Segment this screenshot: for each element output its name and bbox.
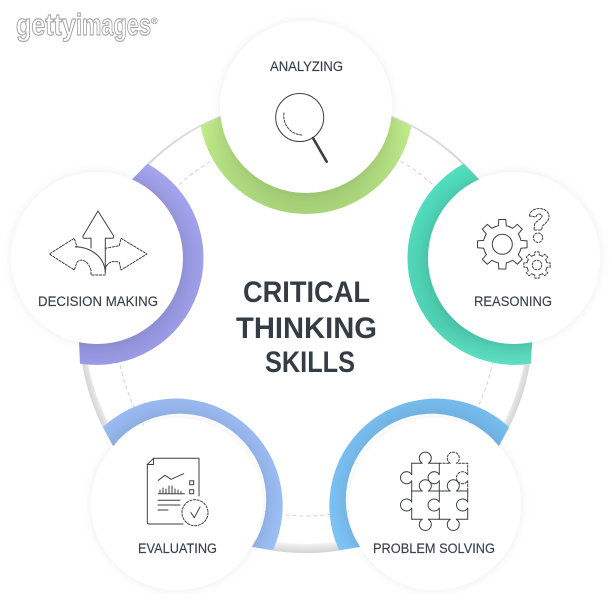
watermark: gettyimages: ® bbox=[151, 16, 158, 26]
arc: analyzing bbox=[201, 117, 411, 214]
circle: reasoning bbox=[428, 172, 600, 344]
circle: evaluating bbox=[91, 418, 263, 590]
label: decision making: DECISION MAKING bbox=[38, 294, 158, 309]
arc: problem solving bbox=[329, 399, 509, 550]
icon: magnifying glass bbox=[276, 94, 327, 162]
icon: three-way arrows bbox=[49, 211, 147, 275]
watermark: gettyimages: images bbox=[76, 7, 151, 42]
title: THINKING bbox=[236, 312, 377, 345]
outer gray ring bbox=[79, 99, 533, 553]
icon: puzzle pieces bbox=[401, 452, 468, 530]
arc: decision making bbox=[79, 164, 204, 365]
arc: evaluating bbox=[103, 399, 283, 550]
icon: gears and question mark bbox=[478, 208, 550, 278]
title bbox=[236, 276, 377, 379]
circle: analyzing bbox=[220, 21, 392, 193]
title: SKILLS bbox=[265, 346, 355, 379]
dashed inner ring bbox=[116, 136, 496, 516]
watermark: gettyimages: getty bbox=[16, 7, 77, 42]
icon: report with check bbox=[147, 458, 208, 526]
arc: reasoning bbox=[407, 164, 532, 365]
label: evaluating: EVALUATING bbox=[138, 541, 217, 556]
title: CRITICAL bbox=[243, 276, 370, 309]
label: reasoning: REASONING bbox=[474, 294, 552, 309]
watermark: gettyimages bbox=[16, 7, 158, 42]
label: analyzing: ANALYZING bbox=[270, 59, 343, 74]
label: problem solving: PROBLEM SOLVING bbox=[373, 541, 495, 556]
circle: decision making bbox=[11, 172, 183, 344]
circle: problem solving bbox=[349, 418, 521, 590]
